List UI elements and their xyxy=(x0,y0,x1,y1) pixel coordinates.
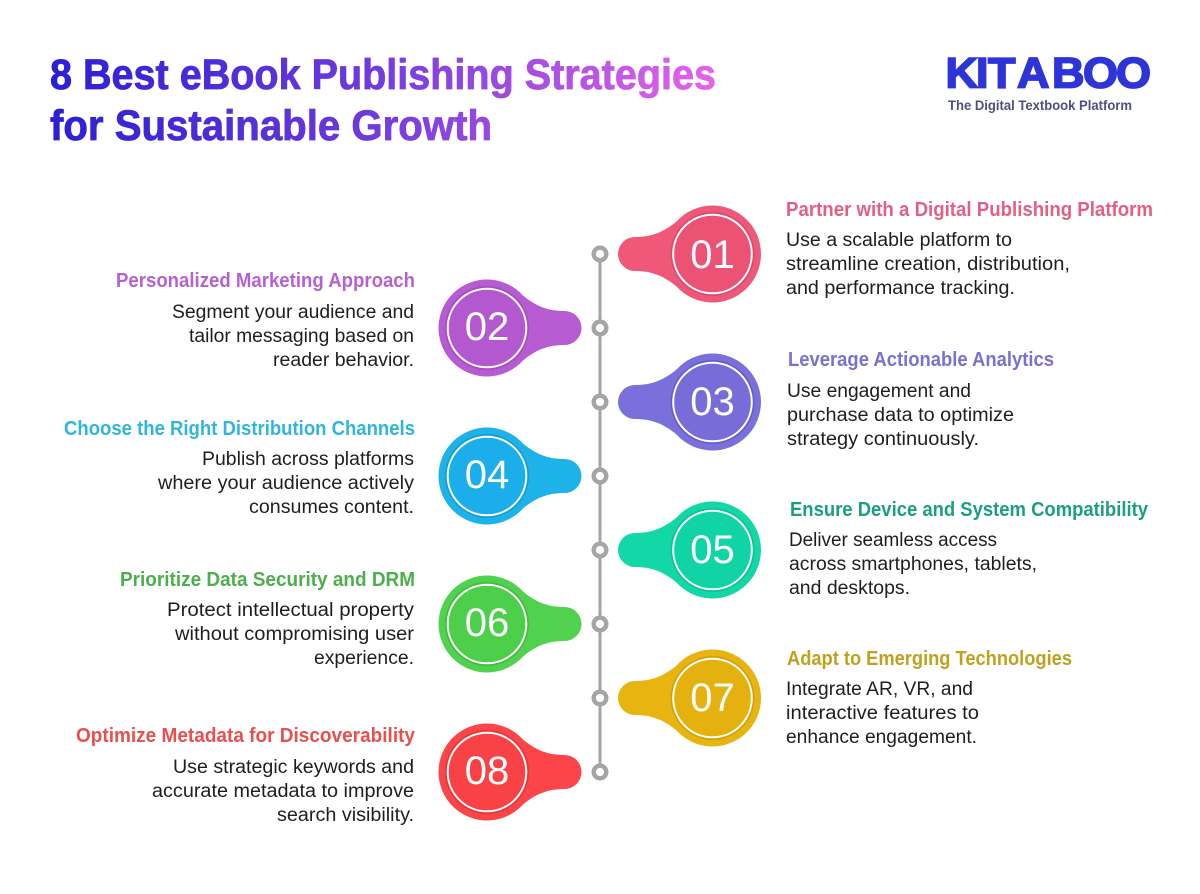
text: step 04: Publish across platforms xyxy=(202,449,414,470)
text: step 05: Ensure Device and System Compatibility xyxy=(790,499,1149,521)
text: step 05: across smartphones, tablets, xyxy=(789,554,1037,575)
pin 01 xyxy=(618,206,761,302)
pin 06: 06 xyxy=(465,601,509,645)
pin 05 xyxy=(618,502,761,598)
text: step 06: Protect intellectual property xyxy=(167,600,415,621)
text: step 03: purchase data to optimize xyxy=(787,405,1014,426)
text: step 04: consumes content. xyxy=(249,497,414,518)
text: step 01: streamline creation, distribution, xyxy=(786,254,1070,275)
text: step 02: reader behavior. xyxy=(273,350,414,371)
text: step 03: Leverage Actionable Analytics xyxy=(788,349,1054,371)
pin 02 xyxy=(438,280,582,376)
text: step 07 xyxy=(786,648,1072,748)
text: step 08: accurate metadata to improve xyxy=(152,781,414,802)
logo: KITABOO: KITABOO xyxy=(945,49,1151,97)
text: step 07: Integrate AR, VR, and xyxy=(786,679,973,700)
text: step 02: Segment your audience and xyxy=(172,302,414,323)
pin 03: 03 xyxy=(690,380,735,424)
text: step 07: Adapt to Emerging Technologies xyxy=(787,648,1072,670)
text: step 05: Deliver seamless access xyxy=(789,530,997,551)
text: step 08 xyxy=(76,725,416,826)
text: step 01: Use a scalable platform to xyxy=(786,230,1012,251)
pin 07: 07 xyxy=(690,676,735,720)
text: step 03: strategy continuously. xyxy=(787,429,979,450)
text: step 07: enhance engagement. xyxy=(786,727,977,748)
text: step 08: search visibility. xyxy=(277,805,414,826)
pin 08: 08 xyxy=(465,749,509,793)
pin 07 xyxy=(618,650,761,746)
text: step 04 xyxy=(64,418,415,518)
pin 05: 05 xyxy=(690,528,735,572)
text: step 01: and performance tracking. xyxy=(786,278,1015,299)
text: step 06: experience. xyxy=(314,648,414,669)
pin 04 xyxy=(438,428,582,524)
pin 03 xyxy=(618,354,761,450)
text: step 01 xyxy=(786,199,1153,299)
pin 06 xyxy=(438,576,582,672)
text: step 01: Partner with a Digital Publishing Platform xyxy=(786,199,1153,221)
text: step 06 xyxy=(120,569,415,669)
text: step 07: interactive features to xyxy=(786,703,979,724)
pin 08 xyxy=(438,724,582,820)
text: step 08: Use strategic keywords and xyxy=(173,757,414,778)
text: step 02: tailor messaging based on xyxy=(189,326,414,347)
logo: KITABOO: The Digital Textbook Platform xyxy=(948,97,1132,113)
title: 8 Best eBook Publishing Strategies xyxy=(50,51,716,99)
text: step 06: Prioritize Data Security and DRM xyxy=(120,569,415,591)
text: step 05 xyxy=(789,499,1149,599)
pin 01: 01 xyxy=(690,233,735,277)
text: step 04: where your audience actively xyxy=(157,473,415,494)
text: step 02: Personalized Marketing Approach xyxy=(116,270,415,292)
title: for Sustainable Growth xyxy=(50,102,492,150)
text: step 03 xyxy=(787,349,1054,450)
text: step 03: Use engagement and xyxy=(787,381,971,402)
text: step 04: Choose the Right Distribution Channels xyxy=(64,418,415,440)
title xyxy=(50,51,716,150)
pin 04: 04 xyxy=(465,453,509,497)
text: step 05: and desktops. xyxy=(789,578,910,599)
text: step 06: without compromising user xyxy=(174,624,415,645)
timeline spine xyxy=(594,248,606,778)
text: step 08: Optimize Metadata for Discoverability xyxy=(76,725,416,747)
text: step 02 xyxy=(116,270,415,371)
pin 02: 02 xyxy=(465,305,509,349)
